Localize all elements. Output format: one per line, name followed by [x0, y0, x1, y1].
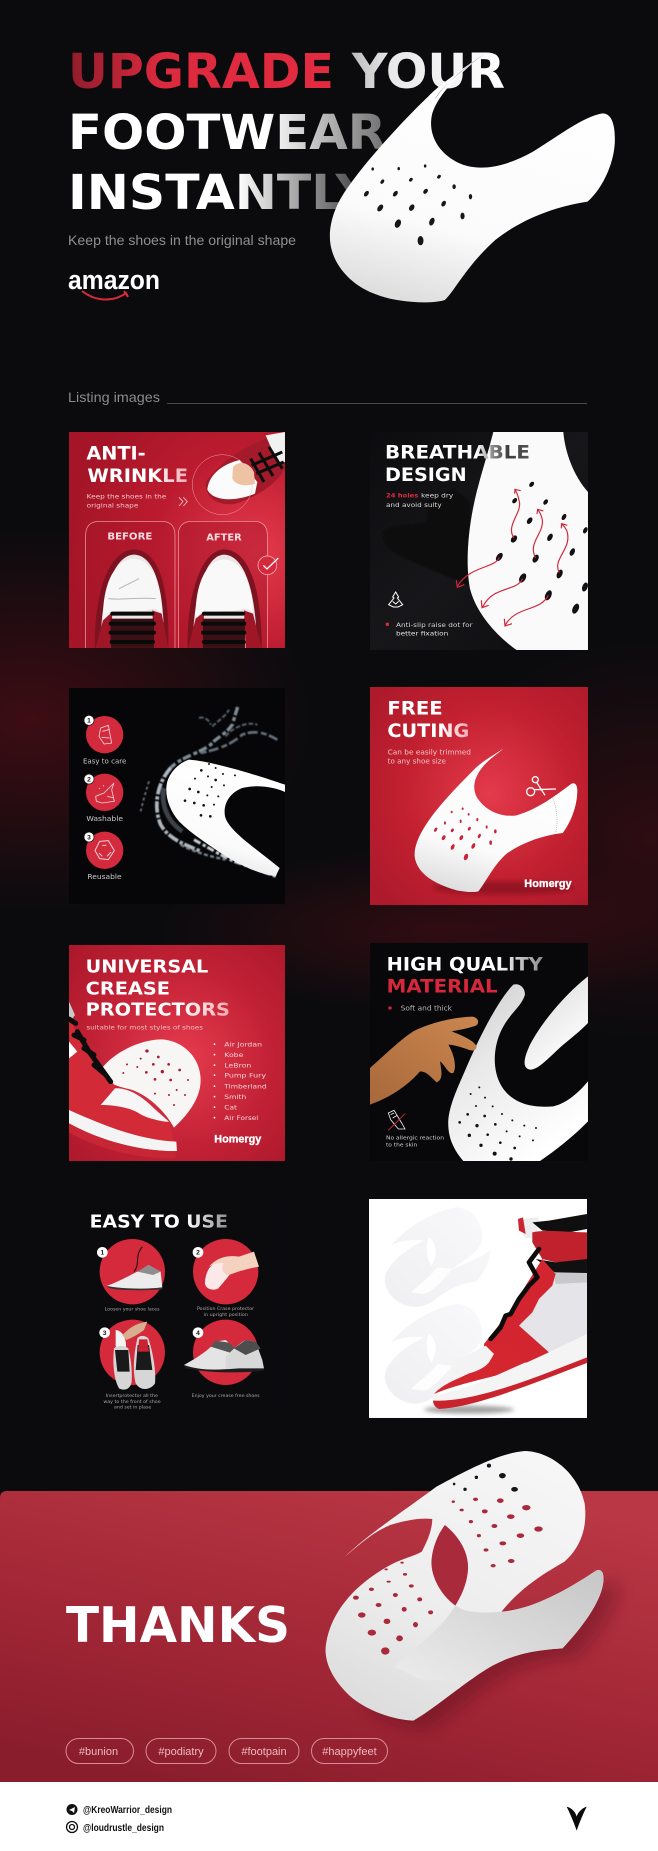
- step 2: 2: [196, 1250, 200, 1257]
- heading: high quality material: HIGH QUALITY: [387, 954, 543, 975]
- list: compatible shoes: •: [213, 1052, 216, 1059]
- panel: thanks banner: [0, 1451, 658, 1782]
- feature: easy to care: 1: [87, 718, 91, 725]
- body text: 24 holes: [386, 493, 454, 509]
- icon: instagram: [66, 1822, 78, 1832]
- subtitle text: Keep the shoes in the: [87, 494, 166, 501]
- hashtag pills: #bunion: [79, 1746, 118, 1758]
- list: compatible shoes: •: [213, 1115, 216, 1122]
- section heading: listing images: Listing images: [68, 389, 160, 405]
- panel: easy to use: [69, 1200, 287, 1418]
- red sneaker: [69, 1002, 177, 1158]
- brand: homergy: Homergy: [214, 1134, 261, 1146]
- feature: reusable: 3: [87, 834, 91, 841]
- list: compatible shoes: Pump Fury: [224, 1072, 266, 1079]
- hero title: YOUR: [351, 44, 505, 100]
- list: compatible shoes: [213, 1042, 267, 1122]
- heading: free cuting: [388, 701, 468, 738]
- feature: washable: [84, 774, 123, 823]
- heading: universal crease protectors: PROTECTORS: [86, 1000, 230, 1021]
- heading: free cuting: CUTING: [387, 721, 469, 742]
- instagram handle: @loudrustle_design: [83, 1823, 164, 1834]
- hero title: UPGRADE: [68, 44, 334, 100]
- icon: telegram: [66, 1804, 78, 1815]
- hero title: INSTANTLY: [68, 165, 373, 221]
- step 3: and set in plase: [114, 1405, 152, 1411]
- step 2: in upright position: [204, 1312, 248, 1318]
- crease protector: [101, 1039, 201, 1128]
- cut line: [553, 798, 557, 832]
- note: no allergic reaction: to the skin: [386, 1143, 418, 1149]
- heading: easy to use: EASY TO USE: [90, 1212, 228, 1232]
- list: compatible shoes: LeBron: [224, 1063, 251, 1070]
- step 3: Insertprotector all the: [106, 1393, 158, 1399]
- panel: free cutting: [370, 687, 588, 905]
- icon: brand logo: [567, 1807, 587, 1831]
- step 2: [193, 1239, 259, 1318]
- subtitle text: original shape: [87, 503, 138, 510]
- water splash: [141, 705, 277, 876]
- icon: anti-slip: [389, 592, 403, 607]
- crease protector closeup: [448, 976, 588, 1161]
- hashtag pills: [66, 1738, 388, 1764]
- shadow under protector: [433, 881, 573, 895]
- panel: product photo with sneaker: [369, 1199, 587, 1418]
- crease protector: [326, 1451, 603, 1721]
- shadow of protector: [367, 1580, 617, 1731]
- heading: anti-wrinkle: WRINKLE: [87, 466, 188, 487]
- heading: high quality material: [387, 954, 543, 997]
- anti-slip note: better fixation: [396, 631, 448, 638]
- heading: breathable design: DESIGN: [385, 465, 467, 486]
- heading: universal crease protectors: [86, 960, 228, 1016]
- list: compatible shoes: Air Forsel: [224, 1115, 259, 1122]
- clear crease protector: top: [385, 1207, 491, 1307]
- list: compatible shoes: Air Jordan: [224, 1042, 262, 1049]
- heading: breathable design: [386, 445, 528, 482]
- after card: AFTER: [206, 532, 242, 543]
- list: compatible shoes: •: [213, 1063, 216, 1070]
- panel: anti-wrinkle: [69, 432, 285, 648]
- hero subtitle: Keep the shoes in the original shape: [68, 232, 296, 248]
- list: compatible shoes: Cat: [224, 1105, 238, 1112]
- panel: breathable design: [370, 432, 589, 650]
- subtitle text: [87, 494, 166, 510]
- list: compatible shoes: •: [213, 1105, 216, 1112]
- note: no allergic reaction: No allergic reaction: [386, 1135, 444, 1141]
- ventilation holes: [458, 1086, 537, 1161]
- feature: washable: Washable: [86, 815, 123, 823]
- feature: easy to care: [83, 715, 126, 765]
- step 4: Enjoy your crease free shoes: [192, 1393, 260, 1399]
- hashtag pills: #footpain: [241, 1746, 287, 1758]
- list: compatible shoes: Smith: [224, 1094, 246, 1101]
- step 3: 3: [103, 1330, 107, 1337]
- hand: [370, 1017, 478, 1105]
- subtitle text: to any shoe size: [388, 758, 446, 766]
- crease protector: [166, 760, 285, 876]
- heading: anti-wrinkle: ANTI-: [86, 444, 146, 465]
- icon: no allergy: [388, 1110, 405, 1130]
- feature: easy to care: Easy to care: [83, 757, 126, 765]
- heading: free cuting: FREE: [387, 699, 443, 720]
- step 1: Loosen your shoe laces: [105, 1306, 160, 1312]
- heading: universal crease protectors: UNIVERSAL: [86, 956, 208, 977]
- anti-slip note: Anti-slip raise dot for: [396, 622, 473, 629]
- panel: high quality material: [370, 943, 588, 1161]
- body text: 24 holes: keep dry: [421, 493, 454, 500]
- feature: reusable: Reusable: [87, 873, 122, 881]
- after card: [178, 521, 267, 648]
- list: compatible shoes: •: [213, 1072, 216, 1079]
- ventilation holes: [122, 1049, 189, 1106]
- note: no allergic reaction: [386, 1135, 444, 1149]
- hashtag pills: #happyfeet: [322, 1746, 377, 1758]
- shoe toe detail in circle: [192, 432, 285, 515]
- body text: 24 holes: 24 holes: [386, 493, 419, 500]
- hero title: FOOTWEAR: [68, 105, 386, 161]
- bullet: soft and thick: Soft and thick: [401, 1004, 452, 1012]
- crease protector closeup: [468, 432, 588, 650]
- telegram handle: @KreoWarrior_design: [83, 1805, 172, 1816]
- ventilation holes: [433, 807, 497, 861]
- step 1: 1: [100, 1250, 104, 1257]
- list: compatible shoes: Kobe: [224, 1052, 243, 1059]
- step 3: [99, 1320, 165, 1411]
- subtitle text: [388, 749, 471, 766]
- before card: BEFORE: [107, 532, 152, 543]
- black sneaker photo: [383, 489, 470, 585]
- panel: care features: [69, 688, 285, 904]
- panel: universal crease protectors: [69, 945, 285, 1161]
- list: compatible shoes: •: [213, 1094, 216, 1101]
- step 3: way to the front of shoe: [103, 1399, 161, 1405]
- anti-slip note: [386, 622, 473, 636]
- heading: breathable design: BREATHABLE: [385, 443, 530, 464]
- before card: [86, 521, 175, 648]
- footer: [0, 1782, 658, 1851]
- hashtag pills: #podiatry: [158, 1746, 204, 1758]
- hero title: [68, 44, 505, 221]
- heading: high quality material: MATERIAL: [387, 976, 498, 997]
- ventilation holes: [184, 763, 236, 818]
- red airflow arrows: [456, 489, 568, 626]
- step 2: Position Crase protector: [197, 1306, 254, 1312]
- hero crease protector: [330, 53, 615, 302]
- step 1: [97, 1239, 165, 1312]
- list: compatible shoes: Timberland: [223, 1083, 267, 1090]
- icon: checkmark badge: [258, 556, 278, 575]
- red and white sneaker: [424, 1214, 587, 1414]
- list: compatible shoes: •: [213, 1083, 216, 1090]
- subtitle text: suitable for most styles of shoes: [86, 1025, 203, 1032]
- heading: universal crease protectors: CREASE: [86, 978, 170, 999]
- brand: homergy: Homergy: [524, 878, 572, 890]
- step 4: [184, 1320, 264, 1399]
- step 4: 4: [196, 1330, 200, 1337]
- feature: reusable: [84, 832, 123, 881]
- icon: chevrons: [179, 497, 187, 506]
- body text: 24 holes: and avoid sulty: [386, 502, 442, 509]
- clear crease protector: bottom: [385, 1304, 491, 1403]
- heading: anti-wrinkle: [86, 446, 187, 482]
- thanks heading: THANKS: [66, 1597, 290, 1654]
- list: compatible shoes: •: [213, 1042, 216, 1049]
- subtitle text: Can be easily trimmed: [388, 749, 471, 757]
- crease protector: [415, 749, 577, 892]
- amazon logo: amazon: [68, 265, 160, 295]
- ventilation holes: [494, 481, 589, 615]
- feature: washable: 2: [87, 776, 91, 783]
- icon: scissors: [527, 777, 556, 796]
